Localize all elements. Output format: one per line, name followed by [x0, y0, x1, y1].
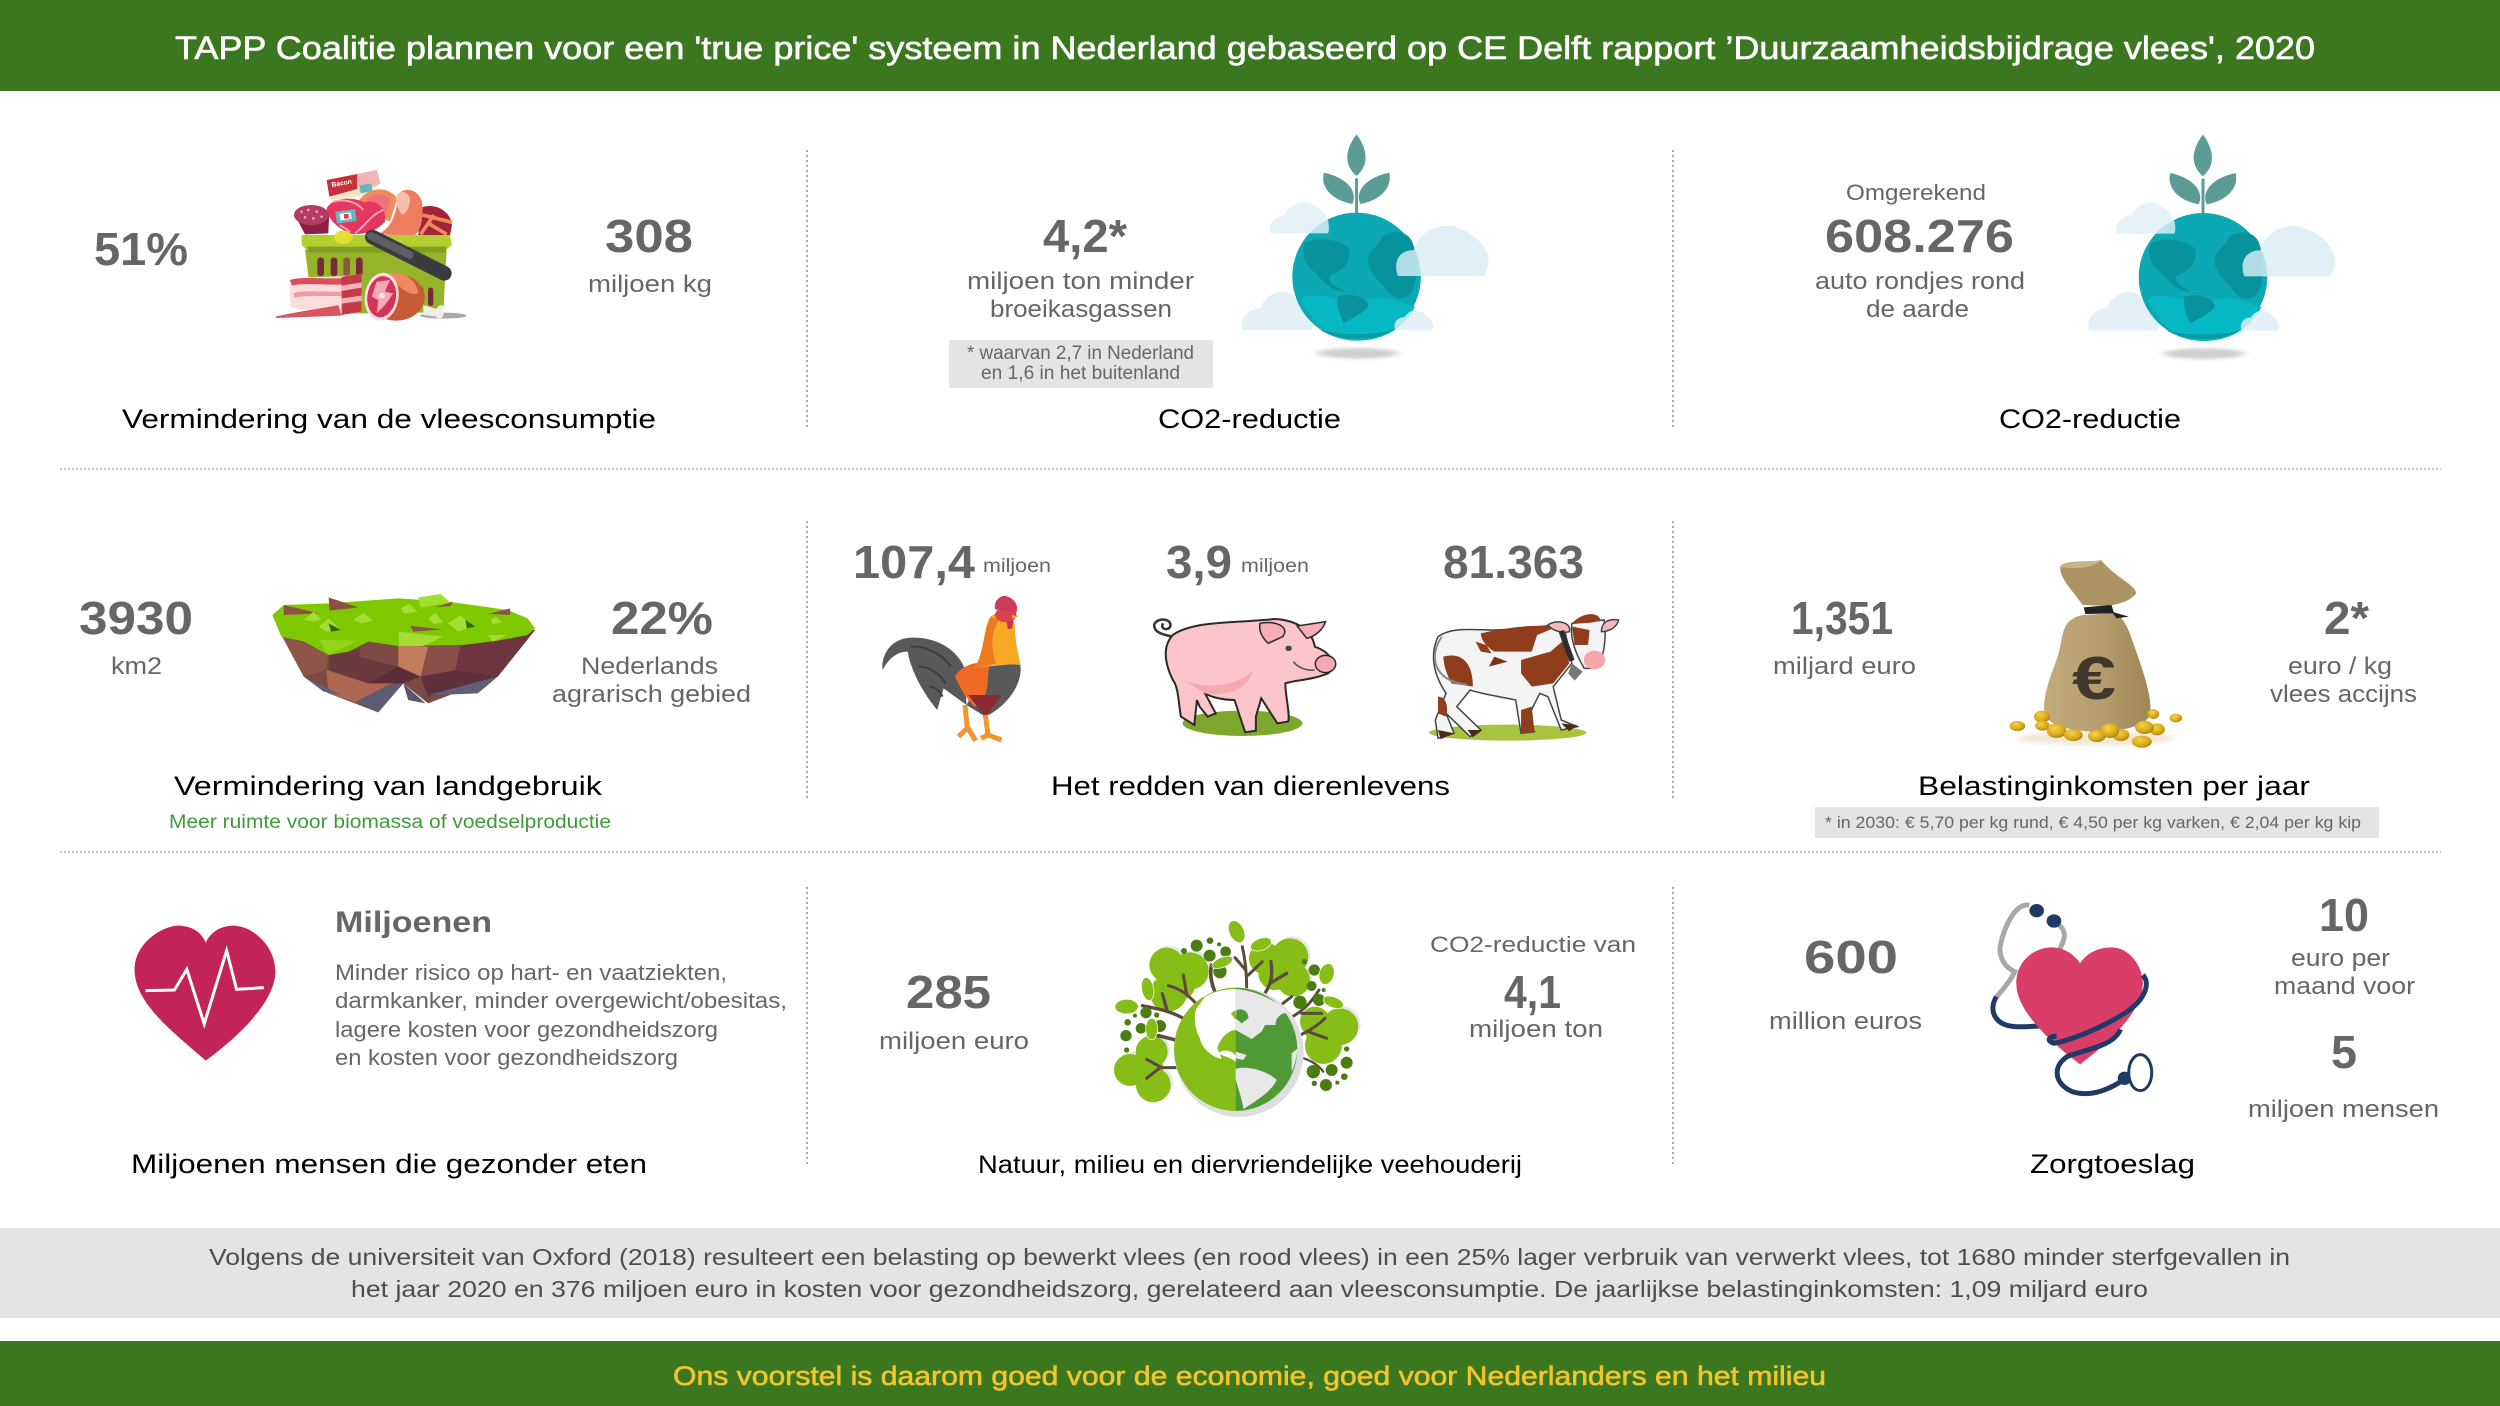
stat: 4,2*: 4,2* — [1043, 210, 1127, 262]
panel heading: Natuur, milieu en diervriendelijke veehouderij — [978, 1151, 1522, 1179]
icon: rooster — [882, 596, 1021, 741]
panel: CO2-reductie 4,2 — [949, 134, 1488, 434]
panel: natuur, milieu en diervriendelijke veehouderij — [879, 918, 1636, 1179]
icon: heart with pulse — [135, 926, 275, 1061]
description: agrarisch gebied — [552, 653, 751, 708]
stat: 3,9 miljoen — [1166, 536, 1309, 588]
heading: miljoenen: Miljoenen — [335, 906, 492, 939]
description: vlees accijns: vlees accijns — [2270, 681, 2417, 708]
description: euro per maand voor: euro per — [2291, 945, 2390, 972]
callout: Oxford study: het jaar 2020 en 376 miljoen euro in kosten voor gezondheidszorg, gerelateerd aan vleesconsumptie. De jaarlijkse belastinginkomsten: 1,09 miljard euro — [351, 1276, 2148, 1302]
icon: cow — [1429, 614, 1619, 741]
icon: meat basket — [275, 170, 467, 323]
stat: 3,9 miljoen: miljoen — [1241, 556, 1309, 577]
footer banner — [0, 1341, 2500, 1406]
panel: belastinginkomsten per jaar — [1773, 560, 2417, 838]
panel heading: Het redden van dierenlevens — [1051, 771, 1450, 801]
description: lagere kosten voor gezondheidszorg — [335, 1017, 718, 1042]
panel: CO2-reductie auto rondjes — [1815, 135, 2335, 434]
stat: 107,4 miljoen — [853, 536, 1051, 588]
unit: miljard euro: miljard euro — [1773, 653, 1916, 680]
stat: 2*: 2* — [2324, 592, 2369, 644]
footnote box — [1815, 807, 2379, 838]
description — [335, 960, 787, 1070]
description: agrarisch gebied: Nederlands — [581, 653, 718, 680]
icon: heart with stethoscope — [1993, 904, 2152, 1094]
panel: vermindering van landgebruik — [79, 592, 751, 833]
stat: 600: 600 — [1804, 931, 1898, 983]
unit: miljoen ton: miljoen ton — [1469, 1016, 1603, 1043]
icon: meat basket: Bacon — [331, 179, 352, 189]
stat: 608.276: 608.276 — [1825, 210, 2014, 262]
description: Minder risico op hart- en vaatziekten, — [335, 960, 727, 985]
stat: 285: 285 — [906, 966, 991, 1018]
icon: earth with trees — [1114, 918, 1361, 1117]
description: broeikasgassen: miljoen ton minder — [967, 268, 1194, 295]
panel: het redden van dierenlevens — [853, 536, 1619, 801]
description: vlees accijns: euro / kg — [2288, 653, 2392, 680]
panel heading: Miljoenen mensen die gezonder eten — [131, 1149, 647, 1179]
description: broeikasgassen — [967, 268, 1194, 323]
label: omgerekend: Omgerekend — [1846, 180, 1986, 205]
stat: 3930: 3930 — [79, 592, 193, 644]
description: auto rondjes: auto rondjes rond — [1815, 268, 2025, 295]
stat: 1,351: 1,351 — [1791, 592, 1893, 644]
stat: 107,4 miljoen: miljoen — [983, 556, 1051, 577]
stat: 3,9 miljoen: 3,9 — [1166, 536, 1232, 588]
icon: pig — [1154, 619, 1336, 736]
description: euro per maand voor — [2274, 945, 2415, 1000]
description: euro per maand voor: maand voor — [2274, 973, 2415, 1000]
description: vlees accijns — [2270, 653, 2417, 708]
icon: earth with sprout — [2088, 135, 2335, 359]
icon: money bag with coins: € — [2072, 645, 2116, 712]
callout: Oxford study: Volgens de universiteit van Oxford (2018) resulteert een belasting op bewerkt vlees (en rood vlees) in een 25% lager verbruik van verwerkt vlees, tot 1680 minder sterfgevallen in — [209, 1244, 2290, 1270]
panel heading: CO2-reductie — [1158, 404, 1341, 434]
stat: 308: 308 — [605, 210, 693, 262]
title: TAPP Coalitie plannen voor een 'true price' systeem in Nederland gebaseerd op CE Delft rapport ’Duurzaamheidsbijdrage vlees', 2020 — [175, 30, 2315, 66]
footnote box: en 1,6 in het buitenland — [981, 363, 1180, 384]
stat: 4,1: 4,1 — [1504, 966, 1561, 1018]
footnote box: * waarvan 2,7 in Nederland — [967, 343, 1194, 364]
panel: miljoenen mensen die gezonder eten — [131, 906, 787, 1179]
description: auto rondjes: de aarde — [1866, 296, 1969, 323]
stat: 5: 5 — [2331, 1026, 2357, 1078]
description: en kosten voor gezondheidszorg — [335, 1045, 678, 1070]
panel: vermindering van de vleesconsumptie — [94, 170, 712, 434]
callout: Oxford study — [0, 1228, 2500, 1318]
stat: 22%: 22% — [611, 592, 713, 644]
panel: zorgtoeslag — [1769, 889, 2439, 1179]
panel heading: Belastinginkomsten per jaar — [1918, 771, 2310, 801]
label: CO2-reductie van: CO2-reductie van — [1430, 932, 1636, 957]
stat: 107,4 miljoen: 107,4 — [853, 536, 975, 588]
unit: miljoen euro: miljoen euro — [879, 1028, 1029, 1055]
footnote box: * in 2030: € 5,70 per kg rund, € 4,50 per kg varken, € 2,04 per kg kip — [1825, 813, 2361, 832]
stat: 10: 10 — [2319, 889, 2369, 941]
icon: earth with sprout — [1242, 134, 1488, 359]
panel heading: CO2-reductie — [1999, 404, 2181, 434]
panel heading: Vermindering van de vleesconsumptie — [122, 404, 656, 434]
icon: money bag with coins — [2009, 560, 2182, 748]
unit: miljoen kg: miljoen kg — [588, 271, 712, 298]
icon: floating island — [272, 594, 535, 712]
header banner — [0, 0, 2500, 91]
unit: km2: km2 — [111, 653, 162, 680]
description: broeikasgassen: broeikasgassen — [990, 296, 1172, 323]
description: auto rondjes — [1815, 268, 2025, 323]
stat: 51%: 51% — [94, 223, 188, 275]
panel heading: Zorgtoeslag — [2030, 1149, 2195, 1179]
description: agrarisch gebied: agrarisch gebied — [552, 681, 751, 708]
green note: Meer ruimte voor biomassa of voedselproductie — [169, 812, 611, 833]
panel heading: Vermindering van landgebruik — [174, 771, 603, 801]
stat: 81.363: 81.363 — [1443, 536, 1584, 588]
footer banner: Ons voorstel is daarom goed voor de economie, goed voor Nederlanders en het milieu — [673, 1361, 1826, 1391]
unit: miljoen mensen: miljoen mensen — [2248, 1096, 2439, 1123]
footnote box — [949, 340, 1213, 388]
unit: million euros: million euros — [1769, 1008, 1922, 1035]
description: darmkanker, minder overgewicht/obesitas, — [335, 988, 787, 1013]
